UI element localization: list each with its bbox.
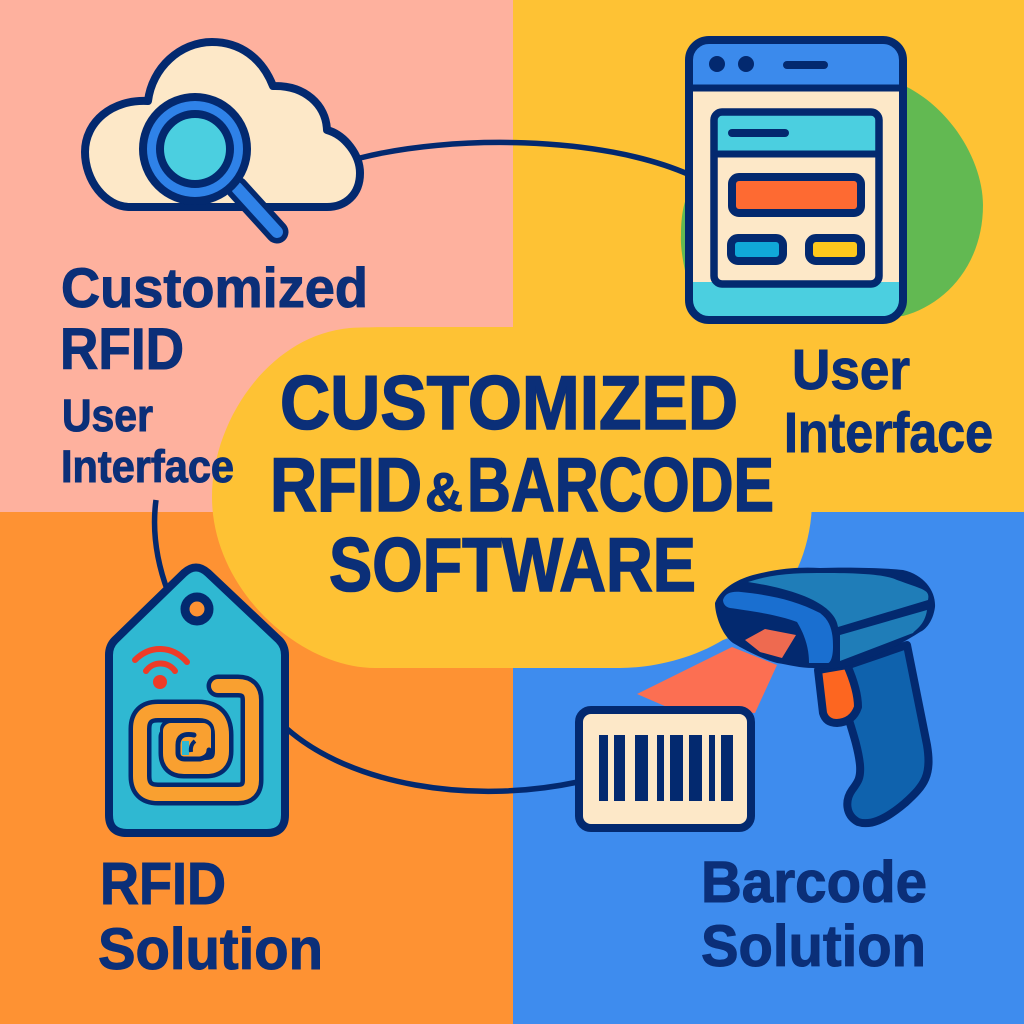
icon: laser beam [637,647,777,713]
heading: barcode solution line 2: Solution [701,914,926,979]
text: user interface left line 2: Interface [61,441,234,492]
icon: barcode scanner [715,568,935,823]
heading: barcode solution: Barcode [701,850,927,915]
icon: user interface window [689,40,903,320]
title: RFID [270,443,422,528]
title: BARCODE [467,443,774,528]
connector: label to tag [154,500,168,592]
title [270,361,774,608]
heading: user interface right line 2: Interface [784,401,993,465]
central yellow blob [212,327,812,668]
icon: barcode label [579,710,751,828]
heading: RFID solution: RFID [100,851,226,917]
title: SOFTWARE [329,523,696,608]
icon: cloud with magnifier [85,42,360,232]
connector: cloud to interface [360,142,690,175]
icon: RFID tag [109,568,285,833]
text: user interface left: User [62,390,153,441]
connector: tag to barcode [286,728,578,791]
heading: RFID solution line 2: Solution [98,917,323,982]
green blob [681,87,983,320]
heading: top-left label line 2: RFID [60,317,184,382]
heading: top-left label: Customized [61,256,368,319]
panel: top-left background [0,0,513,512]
title: CUSTOMIZED [280,361,738,446]
panel: bottom-left background [0,512,513,1024]
title: & [425,461,463,523]
heading: user interface right: User [792,338,910,402]
panel: top-right background [513,0,1024,512]
panel: bottom-right background [513,512,1024,1024]
